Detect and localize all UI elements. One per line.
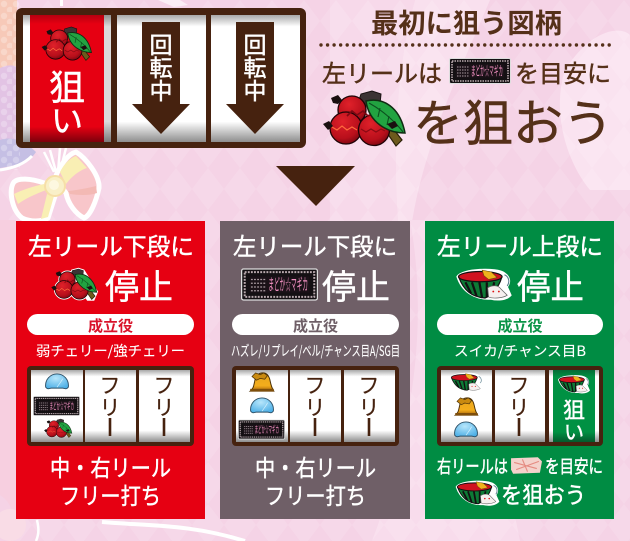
- footer text: フリー打ち: [265, 477, 366, 511]
- reel diagram: [232, 366, 399, 446]
- panel heading: 左リール下段に: [28, 227, 194, 262]
- footer text: [255, 449, 376, 511]
- reel diagram: リ: [100, 392, 120, 422]
- instruction text: guide: を目安に: [515, 54, 611, 89]
- footer text: 中・右リール: [255, 449, 376, 483]
- ribbon bow decoration: [11, 148, 99, 221]
- reel diagram: フ: [304, 370, 326, 400]
- center reel spinning arrow: 中: [150, 72, 172, 106]
- reel diagram: フ: [100, 370, 120, 400]
- arrow: down triangle: [276, 166, 355, 206]
- right reel spinning arrow: 中: [244, 72, 266, 106]
- center reel spinning arrow: 回: [150, 26, 172, 60]
- footer text: [50, 449, 171, 511]
- footer text: フリー打ち: [60, 477, 161, 511]
- top slot machine reels: [16, 8, 306, 148]
- panel heading: 左リール上段に: [437, 227, 603, 262]
- reel diagram: フ: [358, 370, 380, 400]
- footer text: 右リールは: [437, 453, 508, 479]
- stop label: 停止: [517, 260, 584, 309]
- reel diagram: フ: [154, 370, 174, 400]
- roles text: ハズレ/リプレイ/ベル/チャンス目A/SG目: [231, 341, 400, 361]
- reel diagram: [27, 366, 194, 446]
- pill: winning role: [232, 314, 399, 336]
- right reel spinning arrow: [211, 15, 300, 142]
- footer text: を目安に: [545, 453, 603, 479]
- right reel spinning arrow: 転: [244, 49, 266, 83]
- roles text: スイカ/チャンス目B: [454, 341, 586, 361]
- reel diagram: リ: [304, 392, 326, 422]
- reel diagram: リ: [508, 392, 530, 422]
- panel: gray logo stop: [220, 221, 410, 519]
- left reel aimed: 狙: [49, 59, 85, 111]
- reel diagram: リ: [358, 392, 380, 422]
- reel diagram: い: [564, 416, 584, 445]
- center reel spinning arrow: 転: [150, 49, 172, 83]
- icon: logo: [242, 269, 317, 300]
- footer text: を狙おう: [501, 476, 586, 510]
- dotted divider: [321, 43, 615, 47]
- stop label: 停止: [105, 260, 173, 309]
- reel diagram: 狙: [563, 393, 585, 425]
- pill: winning role: [27, 314, 194, 336]
- reel diagram: フ: [508, 370, 530, 400]
- panel: green watermelon stop: [425, 221, 614, 519]
- center reel spinning arrow: [117, 15, 206, 142]
- heading: first symbol to aim: 最初に狙う図柄: [371, 2, 562, 41]
- icon: logo symbol: [450, 58, 510, 84]
- pill: winning role: [437, 314, 603, 336]
- pill: winning role: 成立役: [88, 315, 133, 336]
- panel: red cherry stop: [16, 221, 205, 519]
- large text: aim for: を狙おう: [413, 84, 613, 156]
- footer text: [437, 453, 603, 510]
- reel diagram: [437, 366, 603, 446]
- icon: cherry: [51, 269, 97, 299]
- icon: watermelon: [457, 269, 511, 300]
- reel diagram: リ: [154, 392, 174, 422]
- left reel aimed: [23, 15, 111, 142]
- pill: winning role: 成立役: [293, 315, 338, 336]
- panel heading: 左リール下段に: [233, 227, 397, 262]
- stop label: 停止: [322, 260, 390, 309]
- pill: winning role: 成立役: [497, 315, 543, 336]
- roles text: 弱チェリー/強チェリー: [36, 341, 185, 361]
- footer text: 中・右リール: [50, 449, 171, 483]
- right reel spinning arrow: 回: [244, 26, 266, 60]
- instruction text: left reel: 左リールは: [322, 54, 442, 89]
- icon: cherry symbol: [323, 91, 405, 146]
- left reel aimed: い: [51, 96, 83, 142]
